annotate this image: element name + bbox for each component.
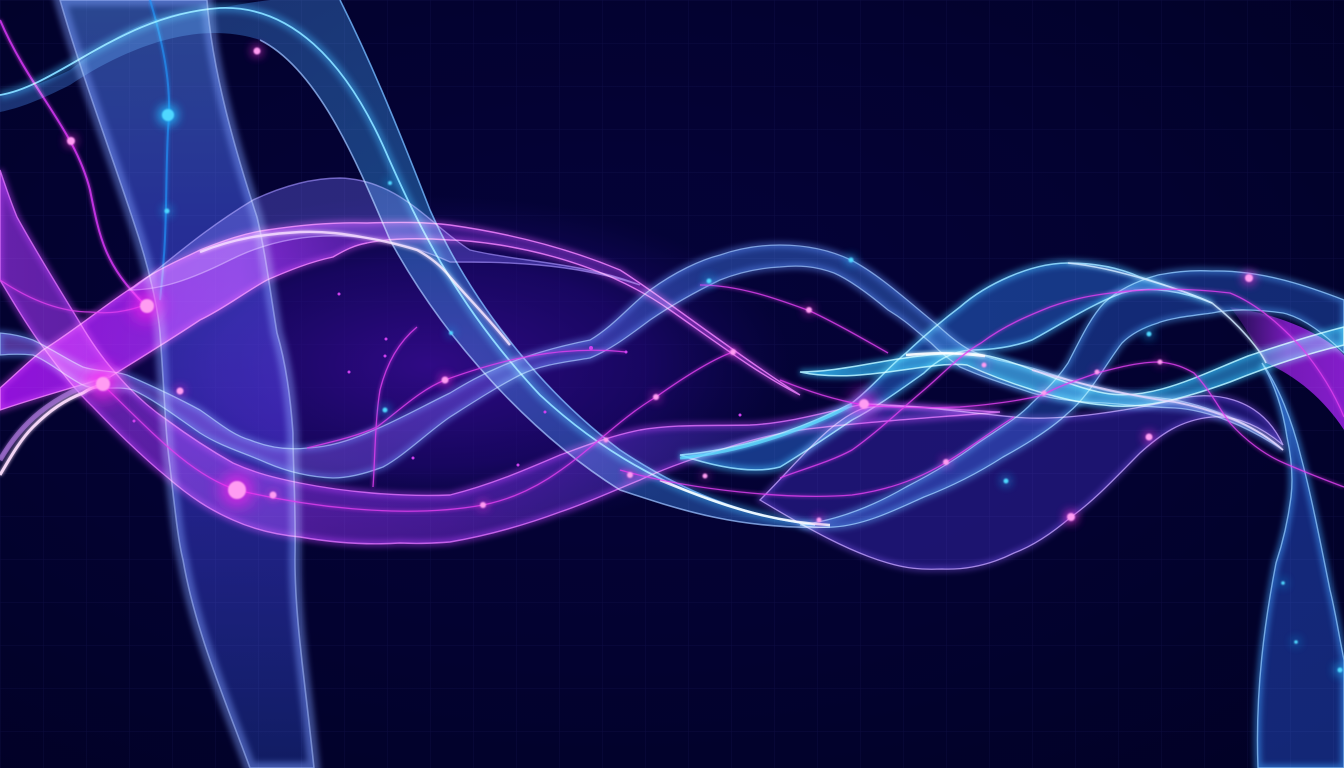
right vertical blue band xyxy=(1257,363,1344,768)
thin cyan vertical strand xyxy=(150,0,169,300)
vertical translucent blue band xyxy=(60,0,314,768)
node cores: cyan xyxy=(162,109,1342,672)
cyan glow halos xyxy=(158,105,1344,675)
top blue ribbon flowing down to the centre xyxy=(0,0,830,527)
node cores: pink xyxy=(67,48,1253,522)
thin magenta line upper left xyxy=(0,20,145,305)
main purple ribbon xyxy=(0,222,800,410)
wavy blue ribbon across the middle xyxy=(0,245,1283,478)
bright cyan ribbon xyxy=(800,327,1344,406)
small dim particles xyxy=(132,292,742,466)
lower belly violet ribbon xyxy=(760,396,1283,569)
glow nodes xyxy=(66,46,1344,675)
rising blue arc ribbon xyxy=(680,263,1212,470)
thin magenta strands through the centre right xyxy=(0,280,1344,511)
bright white strands on the right xyxy=(680,263,1283,458)
right purple ribbon xyxy=(1230,307,1344,430)
right arc blue ribbon xyxy=(800,271,1344,527)
pink glow halos xyxy=(66,46,1255,524)
lower purple band xyxy=(0,170,1000,544)
blue arch ribbon xyxy=(0,178,640,290)
large magenta glow halos xyxy=(88,293,875,505)
white-pink highlight strands xyxy=(0,232,510,475)
